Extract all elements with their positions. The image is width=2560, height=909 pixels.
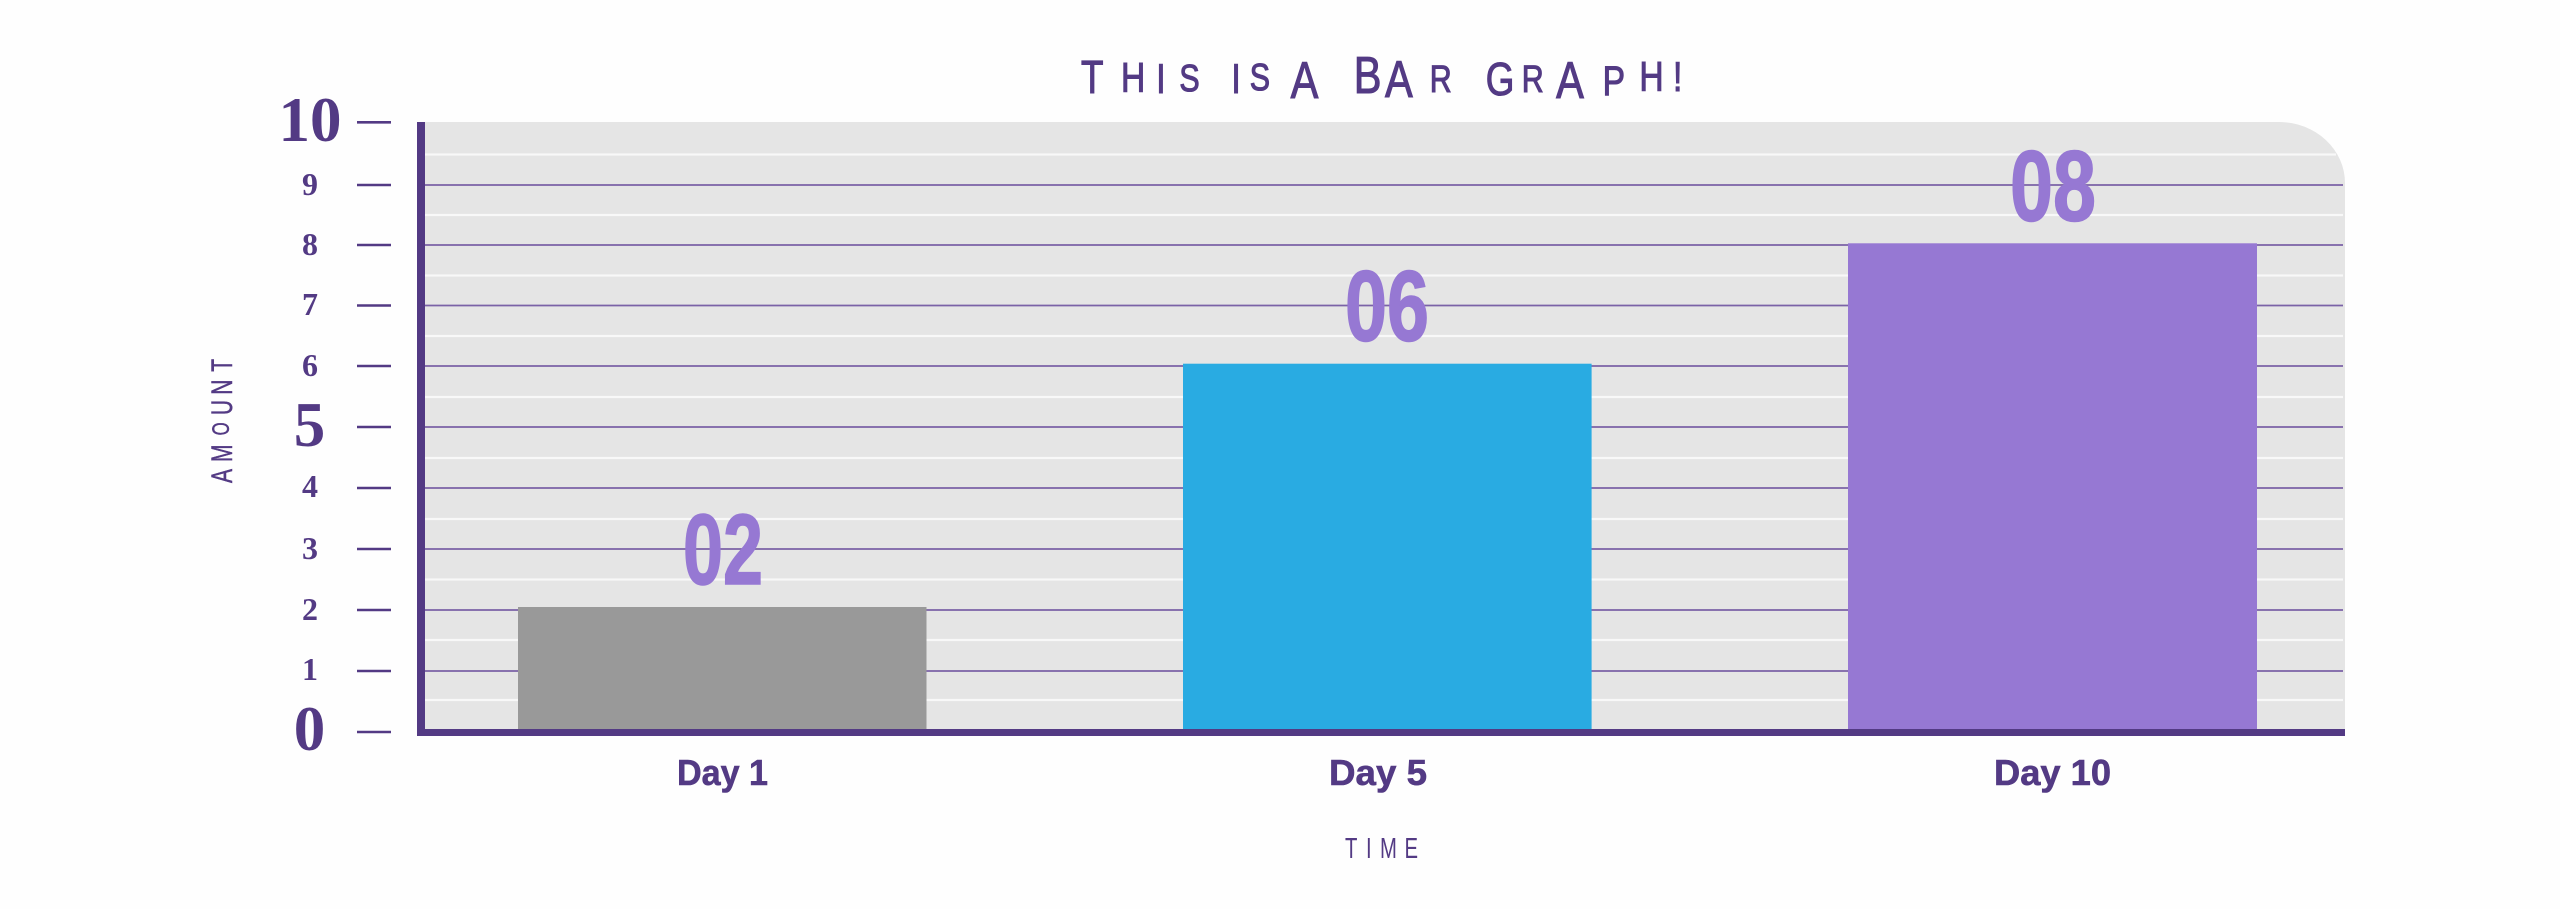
y axis title: N bbox=[207, 380, 239, 395]
title: B bbox=[1354, 46, 1382, 104]
y axis numbers: 0 bbox=[294, 694, 325, 764]
title: G bbox=[1486, 53, 1514, 105]
y axis numbers: 7 bbox=[302, 286, 318, 322]
title: I bbox=[1156, 57, 1166, 103]
y axis title: A bbox=[207, 468, 239, 483]
category label: Day 1: Day 1 bbox=[677, 752, 768, 793]
y axis numbers: 5 bbox=[294, 390, 325, 460]
x axis title: I bbox=[1366, 833, 1372, 865]
y axis ticks bbox=[357, 122, 391, 732]
x axis title: M bbox=[1380, 833, 1397, 865]
title: S bbox=[1250, 57, 1270, 99]
title: A bbox=[1556, 51, 1584, 109]
y axis title: O bbox=[208, 422, 235, 435]
title: H bbox=[1121, 56, 1145, 102]
title: I bbox=[1231, 57, 1241, 103]
title: R bbox=[1430, 59, 1452, 101]
title: R bbox=[1522, 59, 1544, 101]
y axis title: U bbox=[207, 400, 239, 415]
value label: 06: 06 bbox=[1345, 250, 1429, 362]
title: T bbox=[1081, 51, 1103, 103]
title: ! bbox=[1673, 55, 1682, 101]
x axis title: E bbox=[1404, 833, 1418, 865]
x axis line bbox=[417, 729, 2345, 736]
category label: Day 5: Day 5 bbox=[1329, 752, 1427, 793]
y axis title: T bbox=[207, 359, 239, 372]
title: A bbox=[1385, 50, 1413, 108]
y axis title: M bbox=[207, 445, 239, 462]
value label: 08: 08 bbox=[2010, 130, 2096, 242]
x axis title: T bbox=[1345, 833, 1357, 865]
bar: Day 10 bbox=[1848, 243, 2257, 729]
y axis numbers: 4 bbox=[302, 468, 318, 504]
bar: Day 5 bbox=[1183, 364, 1592, 729]
title: H bbox=[1639, 55, 1664, 101]
title: S bbox=[1179, 58, 1200, 100]
y axis numbers: 9 bbox=[302, 166, 318, 202]
bar: Day 1 bbox=[518, 607, 926, 729]
y axis numbers: 1 bbox=[302, 651, 318, 687]
y axis numbers bbox=[278, 85, 342, 764]
title bbox=[1081, 46, 1682, 109]
value label: 02: 02 bbox=[683, 494, 763, 606]
category label: Day 10: Day 10 bbox=[1994, 752, 2111, 793]
y axis numbers: 2 bbox=[302, 591, 318, 627]
plot area bbox=[425, 122, 2345, 729]
y axis numbers: 3 bbox=[302, 530, 318, 566]
y axis numbers: 6 bbox=[302, 347, 318, 383]
y axis numbers: 8 bbox=[302, 226, 318, 262]
title: A bbox=[1291, 51, 1319, 109]
title: P bbox=[1603, 59, 1625, 105]
y axis line bbox=[417, 122, 425, 736]
y axis numbers: 10 bbox=[278, 85, 342, 155]
